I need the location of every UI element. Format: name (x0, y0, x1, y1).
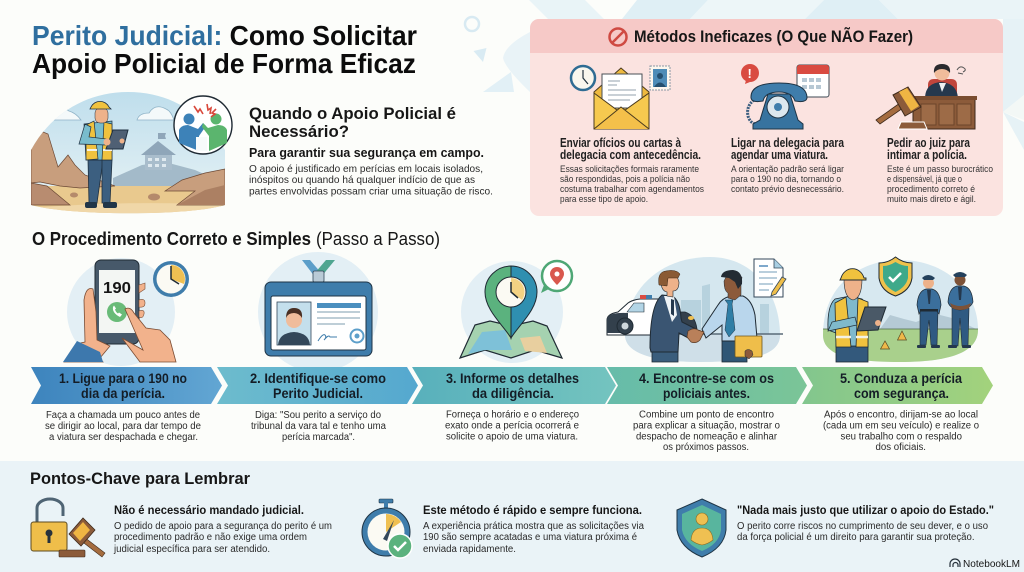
key point 1 text: judicial específica para ser atendido. (113, 544, 270, 555)
step 3 (412, 261, 616, 442)
method 1: costuma trabalhar com agendamentos (560, 184, 704, 195)
subheading: Para garantir sua segurança em campo. (249, 145, 484, 160)
step 5 description (823, 410, 979, 453)
step 2 description: tribunal da vara tal e tenho uma (251, 421, 386, 432)
body text: O apoio é justificado em perícias em locais isolados, (249, 163, 483, 175)
section heading: correct procedure: (Passo a Passo) (316, 229, 440, 249)
method 2: para o 190 no dia, tornando o (731, 174, 841, 185)
key points heading: Pontos-Chave para Lembrar (30, 470, 251, 488)
chevron: step 1 title: 1. Ligue para o 190 no (59, 370, 187, 386)
chevron: step 4 title (607, 367, 807, 404)
icon: prohibited (610, 28, 626, 46)
step 3 description: solicite o apoio de uma viatura. (446, 432, 578, 442)
chevron: step 2 title (217, 367, 418, 404)
step 1 description: se dirigir ao local, para dar tempo de (45, 421, 201, 432)
title: Perito Judicial: Como Solicitar (32, 20, 417, 51)
icon: handshake with police car (607, 255, 786, 365)
body text: inóspitos ou quando há qualquer indício de que as (249, 174, 475, 186)
shield with check (879, 257, 912, 296)
key point 1 text (113, 503, 332, 555)
method 1: Enviar ofícios ou cartas à (560, 136, 681, 150)
chevron: step 5 title (802, 367, 993, 404)
chevron: step 3 title: da diligência. (472, 385, 554, 401)
panel: ineffective methods (530, 19, 1003, 216)
icon: stopwatch with check (362, 499, 412, 558)
key point 2 text (423, 503, 644, 555)
step 4 description: os próximos passos. (663, 442, 749, 453)
body text (249, 163, 493, 198)
figure: police officer (917, 275, 941, 348)
step 3 description: exato onde a perícia ocorrerá e (445, 420, 579, 432)
key point 1 text: Não é necessário mandado judicial. (114, 503, 304, 517)
step 4 description: Combine um ponto de encontro (639, 410, 774, 420)
key point 3 text: O perito corre riscos no cumprimento de seu dever, e o uso (737, 521, 988, 532)
panel: key points (0, 461, 1024, 572)
icon: ID badge (258, 252, 378, 372)
NotebookLM mark: NotebookLM (963, 559, 1020, 570)
step 4 description (633, 410, 780, 453)
chevron: step 4 title: policiais antes. (663, 385, 750, 401)
heading: when needed (249, 104, 456, 141)
key point 3 text: da força policial é um direito para garantir sua proteção. (737, 532, 974, 543)
method 1: para esse tipo de apoio. (560, 194, 648, 205)
document with pen (754, 259, 786, 297)
step 2 description (251, 410, 386, 443)
method 1 (560, 136, 704, 205)
figure: worker (79, 101, 128, 208)
chevron: step 5 title: 5. Conduza a perícia (840, 370, 962, 386)
method 3: e dispensável, já que o (887, 174, 962, 185)
step 3 description (445, 410, 579, 442)
method 2 (731, 136, 845, 195)
icon: shield with person (677, 499, 726, 557)
step 5 description: seu trabalho com o respaldo (840, 432, 962, 442)
chevron: step 3 title (412, 367, 616, 404)
key point 2 text: Este método é rápido e sempre funciona. (423, 503, 642, 517)
step 2 description: Diga: "Sou perito a serviço do (255, 410, 381, 421)
heading: when needed: Quando o Apoio Policial é (249, 104, 456, 123)
figure: man in shirt (702, 270, 762, 362)
key point 3 text: "Nada mais justo que utilizar o apoio do Estado." (737, 503, 994, 517)
step 4 (607, 255, 807, 453)
method 1: são respondidas, pois a polícia não (560, 174, 690, 185)
chevron: step 1 title: dia da perícia. (81, 385, 165, 401)
icon: judge and gavel (876, 64, 977, 129)
icon: envelope, clock and stamp (571, 66, 670, 129)
chevron: step 2 title: Perito Judicial. (273, 385, 363, 401)
method 3 (887, 136, 993, 205)
decorative background shapes (465, 0, 1024, 150)
step 2 (217, 252, 418, 443)
step 4 description: para explicar a situação, mostrar o (633, 420, 780, 432)
step 1 description (45, 410, 201, 443)
method 1: delegacia com antecedência. (560, 148, 701, 162)
icon: telephone, alert and calendar (741, 64, 829, 129)
method 2: contato prévio desnecessário. (731, 184, 844, 195)
icon: telephone, alert and calendar: ! (748, 66, 752, 81)
step 5 description: Após o encontro, dirijam-se ao local (824, 410, 978, 420)
icon: worker with police officers (820, 255, 980, 365)
title (32, 20, 417, 79)
icon: phone dialing 190: 190 (103, 280, 131, 297)
key point 1 text: O pedido de apoio para a segurança do perito é um (114, 521, 332, 532)
method 3: procedimento correto é (887, 184, 975, 195)
method 2: A orientação padrão será ligar (731, 164, 844, 175)
key point 2 text: enviada rapidamente. (423, 544, 516, 555)
step 1 description: a viatura ser despachada e chegar. (49, 432, 198, 443)
police car (607, 295, 697, 335)
body text: partes envolvidas possam criar uma situação de risco. (249, 186, 493, 198)
method 3: intimar a polícia. (887, 148, 967, 162)
heading: when needed: Necessário? (249, 122, 349, 141)
method 2: agendar uma viatura. (731, 148, 828, 162)
step 1 description: Faça a chamada um pouco antes de (46, 410, 200, 421)
icon: map pin with clock (460, 261, 572, 363)
step 2 description: perícia marcada". (282, 432, 355, 443)
figure: man in suit (650, 270, 696, 362)
panel heading: Métodos Ineficazes (O Que NÃO Fazer) (634, 26, 913, 46)
chevron: step 1 title (31, 367, 222, 404)
method 2: Ligar na delegacia para (731, 136, 845, 150)
chevron: step 3 title: 3. Informe os detalhes (446, 370, 579, 386)
method 3: muito mais direto e ágil. (887, 194, 976, 205)
method 1: Essas solicitações formais raramente (560, 164, 699, 175)
method 3: Este é um passo burocrático (887, 164, 993, 175)
key point 2 text: A experiência prática mostra que as solicitações via (423, 521, 644, 532)
chevron: step 4 title: 4. Encontre-se com os (639, 370, 774, 386)
icon: padlock and gavel (31, 499, 105, 557)
key point 3 text (737, 503, 994, 543)
figure: worker (828, 269, 886, 362)
illustration: worker at isolated site (31, 92, 233, 214)
chevron: step 2 title: 2. Identifique-se como (250, 370, 386, 386)
method 3: Pedir ao juiz para (887, 136, 971, 150)
section: when police support is needed (249, 104, 493, 198)
icon: conflict between people (174, 96, 232, 154)
step 5 description: (cada um em seu veículo) e realize o (823, 420, 979, 432)
figure: police officer (948, 272, 973, 348)
step 1 (31, 258, 222, 443)
key point 2 text: 190 são sempre acatadas e uma viatura próxima é (423, 532, 637, 543)
step 4 description: despacho de nomeação e alinhar (636, 432, 778, 442)
step 3 description: Forneça o horário e o endereço (446, 410, 579, 420)
key point 1 text: procedimento padrão e não exige uma ordem (114, 532, 307, 543)
section heading: correct procedure: O Procedimento Correto e Simples (32, 229, 311, 249)
step 5 description: dos oficiais. (876, 442, 926, 453)
step 5 (802, 255, 993, 453)
chevron: step 5 title: com segurança. (854, 385, 949, 401)
title: Apoio Policial de Forma Eficaz (32, 48, 416, 79)
icon: phone dialing 190 (63, 258, 189, 366)
building on the hill (141, 133, 176, 170)
